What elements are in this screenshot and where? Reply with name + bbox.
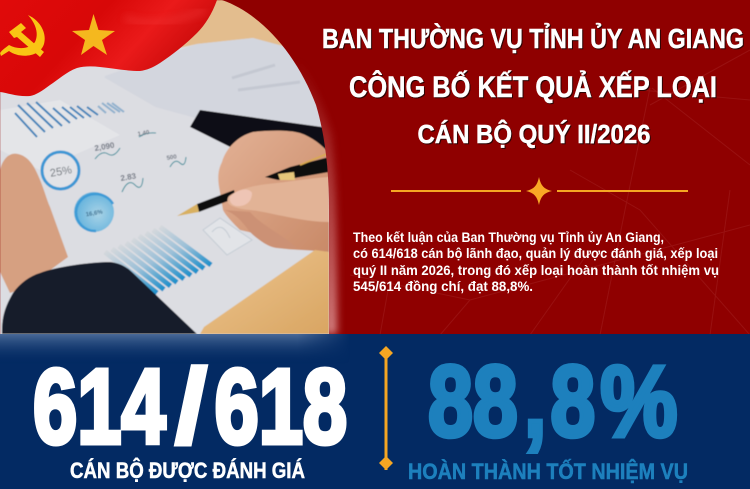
big number 88,8% <box>428 345 678 458</box>
caption cán bộ được đánh giá: CÁN BỘ ĐƯỢC ĐÁNH GIÁ <box>70 458 305 483</box>
photo mini charts <box>95 133 186 192</box>
photo small line chart <box>203 218 252 255</box>
flag folds <box>125 10 205 23</box>
photo mini chart labels: 500 <box>166 154 178 162</box>
photo bar chart top <box>15 102 124 137</box>
panel: red background <box>0 0 750 335</box>
photo wood corner <box>200 250 329 334</box>
intro paragraph: 545/614 đồng chí, đạt 88,8%. <box>353 279 533 294</box>
photo back document <box>106 39 321 126</box>
icon: sparkle <box>526 177 552 205</box>
icon: hammer and sickle <box>0 15 45 57</box>
photo tablet <box>190 110 329 152</box>
intro paragraph: Theo kết luận của Ban Thường vụ Tỉnh ủy An Giang, <box>353 230 664 245</box>
photo desk top <box>180 0 283 48</box>
photo bar chart bottom <box>105 227 211 293</box>
big number 88,8%: 88 <box>428 345 518 458</box>
photo filled disc: 16,6% <box>85 209 104 218</box>
big number 614/618 <box>33 347 347 466</box>
photo mini chart labels: 2.83 <box>120 171 137 183</box>
title <box>322 22 744 149</box>
photo index finger <box>228 177 329 222</box>
intro paragraph <box>353 230 719 294</box>
photo ring 25%: 25% <box>49 164 73 180</box>
icon: gold star <box>72 14 115 55</box>
big number 614/618: 614 <box>33 347 166 466</box>
divider with gold sparkle <box>391 177 688 205</box>
photo mini chart labels <box>94 130 178 183</box>
photo: hands reviewing charts on a desk <box>0 0 335 335</box>
title line 3: CÁN BỘ QUÝ II/2026 <box>418 119 650 149</box>
photo lower fingers <box>228 210 264 240</box>
big number 614/618: / <box>175 347 207 466</box>
photo paper base <box>0 38 329 334</box>
stat: 614/618 evaluated <box>33 347 347 483</box>
photo back document text <box>232 65 300 90</box>
photo pen <box>177 153 329 216</box>
intro paragraph: quý II năm 2026, trong đó xếp loại hoàn thành tốt nhiệm vụ <box>353 263 719 278</box>
big number 88,8%: % <box>600 345 678 457</box>
photo right hand back <box>218 131 329 252</box>
photo dark sleeve <box>2 262 197 334</box>
photo left hand <box>0 154 68 293</box>
flag <box>0 0 217 96</box>
photo filled disc <box>74 192 114 232</box>
intro paragraph: có 614/618 cán bộ lãnh đạo, quản lý được đánh giá, xếp loại <box>353 246 718 261</box>
big number 88,8%: 8 <box>550 345 595 458</box>
photo mini chart labels: 2,090 <box>94 141 116 153</box>
vertical gold divider <box>379 346 393 470</box>
stat: 88,8% completed <box>408 345 688 484</box>
panel: navy statistics band <box>0 334 750 489</box>
caption hoàn thành tốt nhiệm vụ: HOÀN THÀNH TỐT NHIỆM VỤ <box>408 458 688 484</box>
photo mini chart labels: 1,40 <box>137 130 151 138</box>
big number 614/618: 618 <box>215 347 347 466</box>
photo main report sheet <box>102 79 230 147</box>
photo ring 25% <box>42 152 79 189</box>
big number 88,8%: , <box>524 345 546 458</box>
